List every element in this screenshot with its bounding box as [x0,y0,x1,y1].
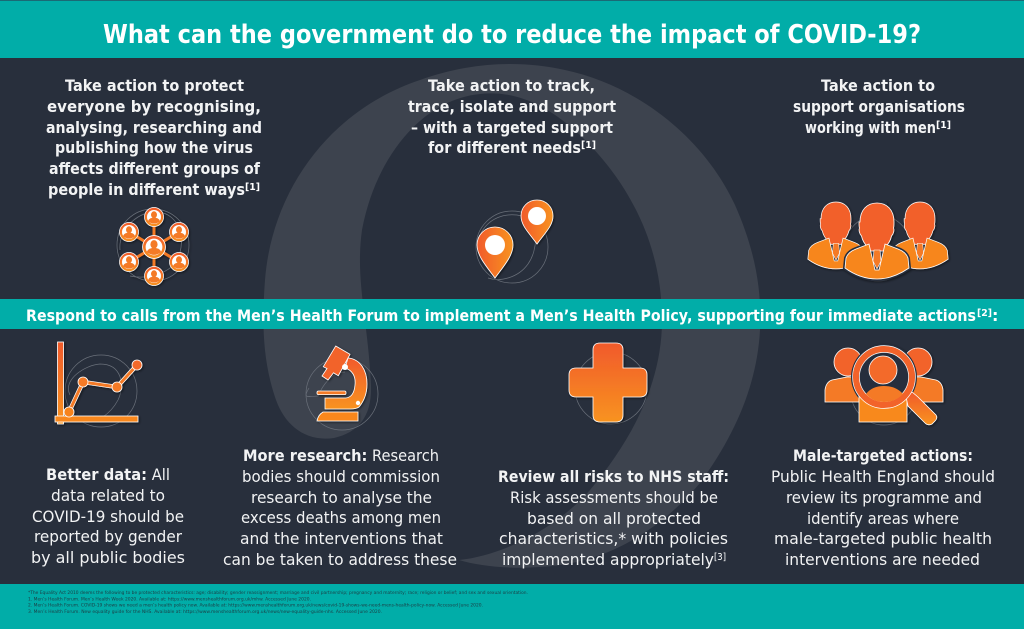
header band [0,0,1024,58]
text block: male-targeted actions: male-targeted public health [774,529,992,548]
section band [0,299,1024,329]
text block: review risks: implemented appropriately [502,550,714,569]
text block: protect everyone: people in different ways [48,180,245,199]
icon: three business men [808,202,948,281]
text block: track and trace: for different needs [428,138,581,157]
text block: male-targeted actions: identify areas where [807,509,959,528]
text block: support organisations: working with men [805,118,936,137]
text block: track and trace: trace, isolate and support [408,97,616,116]
text block: better data: reported by gender [34,527,182,546]
text block: support organisations: support organisations [793,97,965,116]
text block: better data: by all public bodies [31,548,185,567]
text block: better data: COVID-19 should be [32,507,184,526]
text block: protect everyone: publishing how the virus [55,138,253,157]
text block: more research: bodies should commission [242,467,440,486]
text block: protect everyone [46,76,262,199]
footer band: 3. Men’s Health Forum. New equality guide for the NHS. Available at: https://www.menshealthforum.org.uk/news/new-equality-guide-nhs. Accessed June 2020. [28,609,382,615]
icon: medical cross [569,343,647,424]
text block: better data [31,465,185,567]
text block: male-targeted actions [771,446,995,569]
text block: track and trace: – with a targeted support [411,118,613,137]
text block: track and trace [408,76,616,157]
text block: male-targeted actions: interventions are needed [785,550,980,569]
background swoosh [263,64,760,568]
text block: support organisations [793,76,965,137]
text block: more research: More research: Research [243,446,439,465]
text block: review risks: characteristics,* with policies [499,529,728,548]
text block: track and trace: Take action to track, [428,76,595,95]
text block: better data: data related to [51,486,165,505]
text block: protect everyone: analysing, researching and [46,118,262,137]
text block: protect everyone: everyone by recognising, [47,97,261,116]
text block: track and trace: [1] [581,140,596,151]
text block: support organisations: Take action to [821,76,935,95]
footnotes: *The Equality Act 2010 deems the following to be protected characteristics: age; disability; gender reassignment; marriage and civil partnership; pregnancy and maternity; race; religion or belief; and sex and sexual orientation. [28,590,528,596]
text block: better data: Better data: All [46,465,170,484]
text block: protect everyone: [1] [245,182,260,193]
text block: support organisations: [1] [936,120,951,131]
icon: line chart [55,342,142,427]
text block: protect everyone: Take action to protect [65,76,244,95]
text block: review risks: based on all protected [527,509,701,528]
footer band: 1. Men’s Health Forum. Men’s Health Week 2020. Available at: https://www.menshealthforum.org.uk/mhw. Accessed June 2020. [28,596,311,602]
text block: review risks: [3] [714,552,726,563]
text block: protect everyone: affects different groups of [49,159,261,178]
text block: review risks: Review all risks to NHS staff: [498,467,729,486]
text block: more research [223,446,457,569]
title: What can the government do to reduce the impact of COVID-19? [103,20,921,50]
icon: people network [117,208,189,286]
icon: map pins [476,200,553,283]
icon: microscope [306,346,378,430]
text block: male-targeted actions: review its programme and [786,488,982,507]
text block: male-targeted actions: Male-targeted actions: [793,446,973,465]
footer band [0,584,1024,629]
text block: male-targeted actions: Public Health England should [771,467,995,486]
text block: more research: research to analyse the [251,488,432,507]
section band: [2] [977,308,992,319]
text block: more research: excess deaths among men [241,508,441,527]
footer band: 2. Men’s Health Forum. COVID-19 shows we need a men’s health policy now. Available at: https://www.menshealthforum.org.uk/news/covid-19-shows-we-need-mens-health-policy-now. Accessed June 2020. [28,603,483,609]
text block: review risks [498,467,729,569]
icon: magnifier over people [825,344,943,425]
section band: : [992,306,998,325]
text block: review risks: Risk assessments should be [510,488,718,507]
text block: more research: and the interventions that [240,529,443,548]
text block: more research: can be taken to address these [223,550,457,569]
